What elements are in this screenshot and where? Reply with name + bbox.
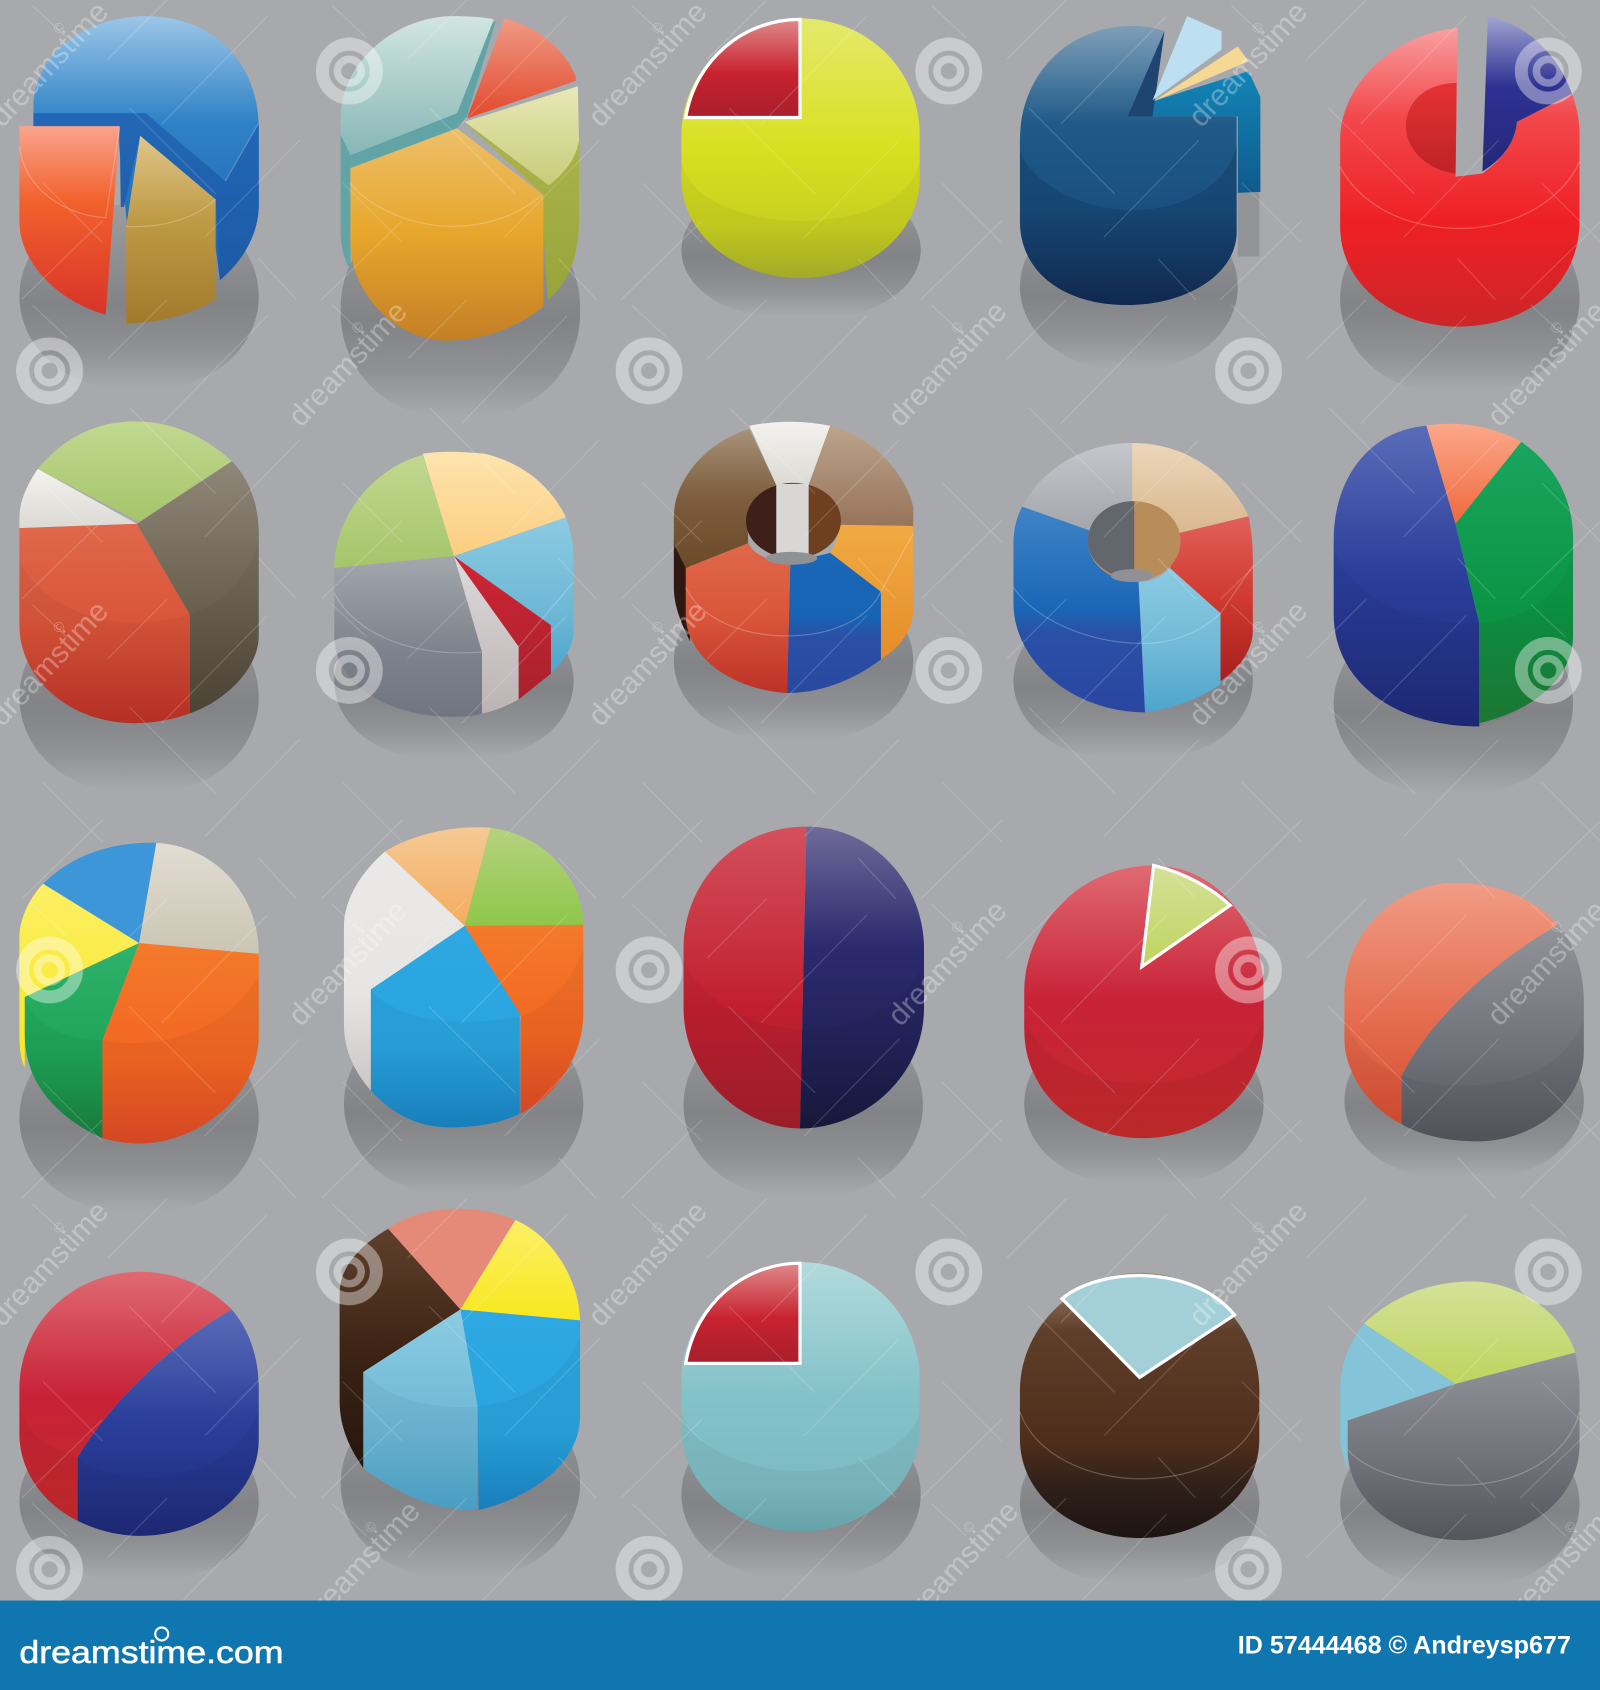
light blue segment	[1340, 1324, 1456, 1471]
red quarter	[686, 19, 800, 117]
aqua body	[681, 1262, 920, 1532]
dark brown segment	[340, 1229, 460, 1468]
orange segment	[465, 925, 583, 1113]
green wedge	[1142, 865, 1230, 967]
watermark text: ©	[49, 617, 69, 636]
footer credit: ID 57444468 © Andreysp677	[1238, 1632, 1571, 1659]
left brown segment	[674, 429, 776, 568]
chart 8: brown and orange donut	[674, 422, 913, 693]
blue segment	[43, 843, 156, 943]
navy segment	[78, 1310, 259, 1536]
chart 6: red, brown, pale and green pie	[19, 421, 259, 723]
watermark text: dreamstime	[882, 894, 1013, 1032]
watermark text: dreamstime	[282, 894, 414, 1032]
orange segment	[1426, 424, 1521, 524]
red segment	[686, 543, 790, 693]
watermark text: ©	[1547, 917, 1566, 936]
hole dark half and strip	[746, 483, 794, 556]
red segment	[454, 556, 551, 699]
side	[684, 959, 924, 1128]
shadows row 3	[19, 1013, 1584, 1211]
watermark text: ©	[1248, 1218, 1267, 1236]
red donut body	[1340, 28, 1580, 327]
teal segment	[341, 16, 494, 155]
olive wall	[465, 122, 579, 300]
watermark text: dreamstime	[582, 1195, 713, 1333]
brown segment	[137, 461, 259, 714]
grey segment	[1348, 1353, 1580, 1540]
side	[25, 975, 259, 1144]
red segment	[19, 524, 190, 723]
chart 20: grey, green and blue pie	[1340, 1282, 1580, 1540]
watermark text: ©	[1561, 1517, 1580, 1536]
yellow segment	[460, 1220, 580, 1320]
chart 3: lime pie with red quarter	[681, 18, 920, 278]
watermark text: dreamstime	[882, 295, 1013, 433]
chart 1: exploded blue, red and gold pie	[19, 16, 259, 323]
side	[1024, 1019, 1264, 1138]
chart 13: half red half navy pie	[684, 827, 924, 1128]
watermark text: ©	[959, 1517, 978, 1536]
chart 9: blue donut	[1013, 443, 1253, 712]
chart 17: salmon, yellow, brown and blue pie	[340, 1209, 580, 1510]
brown body	[1020, 1273, 1259, 1538]
hole	[1088, 501, 1181, 581]
blue segment	[33, 16, 259, 280]
watermark text: ©	[648, 1218, 667, 1236]
watermark text: ©	[49, 18, 69, 37]
footer bar	[0, 1601, 1600, 1690]
green segment	[1456, 442, 1573, 723]
watermark text: dreamstime	[1182, 1195, 1314, 1333]
green segment	[1364, 1282, 1575, 1384]
beige segment	[139, 843, 259, 954]
red segment	[19, 126, 120, 315]
light blue wedge	[1153, 16, 1222, 100]
shadows row 2	[19, 582, 1573, 793]
watermark text: dreamstime	[282, 295, 414, 433]
white segment	[749, 422, 830, 485]
orange segment	[102, 943, 259, 1144]
watermark text: ©	[947, 318, 967, 337]
red body	[1024, 865, 1264, 1138]
green segment	[334, 455, 454, 568]
chart 10: navy, orange and green pie	[1334, 424, 1573, 726]
lime body	[681, 18, 920, 278]
right blue block	[1153, 71, 1260, 193]
watermark text: ©	[348, 318, 367, 337]
watermark text: ©	[361, 1517, 380, 1536]
orange segment	[350, 128, 543, 341]
olive segment	[465, 86, 579, 185]
blue segment	[371, 926, 520, 1127]
red half	[684, 827, 806, 1128]
footer logo spiral	[155, 1627, 168, 1640]
watermark text: ©	[1248, 617, 1267, 636]
chart 18: aqua pie with red quarter	[681, 1262, 920, 1532]
hole	[746, 483, 841, 558]
blue segment	[454, 517, 574, 674]
side	[19, 539, 259, 723]
grey segment	[334, 556, 482, 717]
red quarter	[686, 1263, 800, 1363]
watermark text: dreamstime	[893, 1495, 1025, 1632]
green segment	[25, 943, 139, 1138]
watermark text: ©	[1248, 18, 1267, 37]
side	[681, 1412, 920, 1532]
chart 2: five segment exploded pie	[341, 16, 579, 341]
chart 7: multi segment grey pie	[334, 452, 574, 717]
side	[371, 948, 583, 1127]
peach segment	[385, 827, 491, 926]
hole grey half	[1088, 501, 1134, 581]
chart 5: red donut with blue segment	[1340, 16, 1580, 327]
grey segment	[1402, 925, 1584, 1141]
cream segment	[423, 452, 566, 556]
chart 11: five colour pie	[19, 843, 259, 1144]
watermark text: dreamstime	[295, 1495, 427, 1632]
light blue segment	[1139, 568, 1220, 712]
cream wedge	[1154, 46, 1249, 101]
hole	[1406, 83, 1457, 174]
watermark text: ©	[1547, 318, 1566, 337]
blue segment	[460, 1310, 580, 1510]
footer logo: dreamstime.com	[19, 1635, 284, 1670]
teal wall	[341, 20, 496, 269]
red segment	[467, 18, 576, 119]
orange segment	[830, 525, 913, 660]
watermark text: ©	[947, 917, 967, 936]
chart 15: salmon and grey pie	[1344, 883, 1584, 1141]
side	[19, 1407, 259, 1536]
dark wedge wall	[1128, 31, 1164, 116]
yellow segment	[19, 884, 139, 1067]
silver segment	[454, 556, 519, 714]
navy side	[1020, 146, 1237, 305]
blue segment	[787, 553, 881, 693]
right brown segment	[809, 426, 913, 526]
navy half	[800, 827, 924, 1128]
light blue segment	[363, 1310, 478, 1510]
watermark text: dreamstime	[1182, 595, 1314, 733]
lime side	[681, 162, 920, 278]
white segment	[344, 851, 465, 1091]
tan segment	[1132, 443, 1249, 534]
chart 12: blue, orange, white and green pie	[344, 827, 583, 1127]
grey segment	[1022, 443, 1132, 530]
watermark text: ©	[49, 1218, 69, 1236]
pale segment	[19, 469, 137, 528]
side	[1334, 550, 1573, 726]
navy body	[1020, 26, 1237, 305]
green segment	[38, 421, 232, 522]
chart 19: dark brown pie with aqua wedge	[1020, 1273, 1259, 1538]
watermark text: dreamstime	[582, 595, 713, 733]
blue segment wall	[33, 113, 259, 280]
gold segment	[126, 136, 216, 323]
shadows row 4	[19, 1390, 1580, 1584]
chart 14: red pie with green wedge	[1024, 865, 1264, 1138]
chart 16: red and navy pie	[19, 1272, 259, 1536]
side	[1344, 1019, 1584, 1141]
green segment	[465, 828, 583, 926]
chart 4: navy pie with exploded wedges	[1020, 16, 1260, 305]
side	[363, 1336, 580, 1510]
left dark side	[674, 539, 690, 641]
blue segment	[1482, 16, 1572, 171]
watermark text: ©	[648, 617, 667, 636]
red segment	[19, 1272, 232, 1521]
watermark text: ©	[348, 917, 367, 936]
red segment	[1170, 516, 1253, 681]
navy segment	[1334, 426, 1479, 726]
blue segment	[1013, 507, 1145, 712]
salmon segment	[388, 1209, 515, 1310]
aqua wedge	[1062, 1276, 1235, 1377]
salmon segment	[1344, 883, 1558, 1124]
shadows row 1	[19, 183, 1580, 416]
watermark text: ©	[648, 18, 667, 37]
